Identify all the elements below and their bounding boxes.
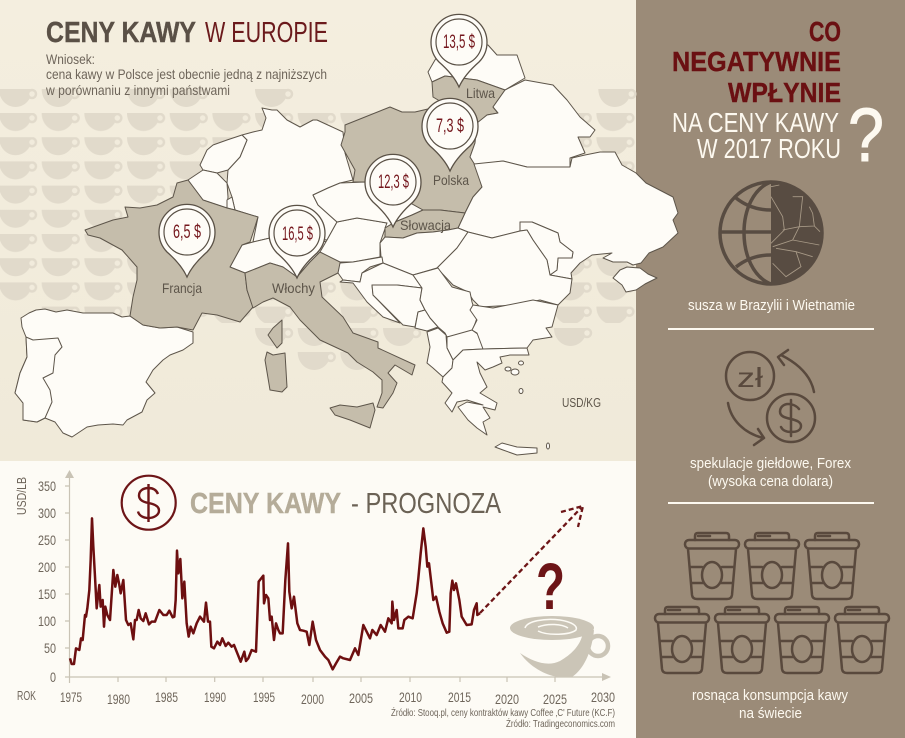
title bbox=[46, 17, 328, 49]
country: Luxembourg bbox=[227, 197, 235, 210]
icon: takeaway cups bbox=[655, 533, 889, 673]
y axis arrow bbox=[65, 470, 74, 478]
y axis title: USD/LB bbox=[15, 477, 29, 515]
line: coffee price history bbox=[70, 518, 480, 669]
y axis labels: 350 bbox=[38, 478, 56, 494]
panel: right sidebar bbox=[636, 0, 905, 738]
sidebar heading: NA CENY KAWY bbox=[672, 107, 839, 138]
x axis labels: 2010 bbox=[399, 689, 422, 705]
text: consumption bbox=[692, 687, 848, 722]
chart heading: CENY KAWY bbox=[190, 488, 341, 520]
pin: Francja bbox=[159, 204, 215, 277]
country: Montenegro bbox=[415, 310, 438, 331]
x axis labels: 1990 bbox=[204, 689, 226, 705]
pin: Słowacja bbox=[365, 154, 421, 227]
x axis labels: 1995 bbox=[253, 689, 275, 705]
conclusion text block: Wniosek: bbox=[46, 51, 95, 67]
country: North Macedonia bbox=[447, 330, 483, 360]
source notes bbox=[391, 706, 615, 730]
country labels: Włochy bbox=[272, 280, 315, 296]
y axis labels: 100 bbox=[38, 613, 56, 629]
map of Europe bbox=[15, 45, 678, 455]
country: Serbia bbox=[413, 268, 477, 337]
country: Czechia bbox=[313, 182, 423, 228]
x axis labels bbox=[60, 689, 615, 707]
x axis labels: 2030 bbox=[591, 689, 615, 705]
country: Switzerland bbox=[230, 236, 327, 277]
region: Crimea bbox=[613, 267, 657, 292]
country: Poland bbox=[341, 105, 482, 213]
panel: chart background bbox=[0, 461, 638, 738]
island: Crete bbox=[495, 443, 537, 455]
country labels bbox=[162, 85, 495, 296]
text: consumption: na świecie bbox=[739, 705, 802, 722]
map unit label: USD/KG bbox=[562, 396, 601, 410]
pin: Francja: 6,5 $ bbox=[173, 222, 201, 243]
x axis title: ROK bbox=[17, 688, 36, 703]
background pattern of cups bbox=[0, 89, 638, 370]
y axis labels: 150 bbox=[38, 586, 56, 602]
country labels: Litwa bbox=[466, 85, 495, 101]
text: speculation: spekulacje giełdowe, Forex bbox=[690, 455, 851, 472]
x axis labels: 2000 bbox=[301, 691, 324, 707]
x axis labels: 2015 bbox=[448, 689, 471, 705]
text: consumption: rosnąca konsumpcja kawy bbox=[692, 687, 848, 704]
country: Moldova bbox=[520, 222, 573, 275]
chart bbox=[15, 470, 615, 707]
country: Austria bbox=[320, 218, 387, 262]
source notes: Źródło: Tradingeconomics.com bbox=[506, 717, 615, 730]
country: Italy bbox=[245, 252, 415, 408]
big question mark: ? bbox=[848, 92, 884, 177]
y axis labels: 300 bbox=[38, 505, 56, 521]
conclusion text block: cena kawy w Polsce jest obecnie jedną z najniższych bbox=[46, 66, 327, 82]
country labels: Francja bbox=[162, 280, 202, 296]
sidebar heading bbox=[672, 16, 841, 164]
question mark: ? bbox=[536, 550, 565, 624]
country: Netherlands bbox=[200, 135, 247, 173]
sidebar heading: CO bbox=[809, 16, 841, 47]
country: Portugal bbox=[15, 337, 62, 422]
country labels: Słowacja bbox=[400, 217, 451, 233]
y axis labels: 0 bbox=[50, 669, 56, 685]
pin: Włochy bbox=[269, 205, 325, 278]
country: Hungary bbox=[380, 228, 468, 275]
x axis arrow bbox=[602, 673, 611, 681]
icon: cracked globe bbox=[720, 181, 823, 285]
text: drought: susza w Brazylii i Wietnamie bbox=[688, 297, 855, 314]
title: CENY KAWY bbox=[46, 17, 196, 49]
y axis labels: 50 bbox=[44, 640, 56, 656]
pin: Włochy: 16,5 $ bbox=[282, 224, 313, 245]
sidebar heading: WPŁYNIE bbox=[728, 77, 841, 108]
title: W EUROPIE bbox=[205, 17, 328, 49]
text: speculation bbox=[690, 455, 851, 490]
island: Sicily bbox=[330, 403, 375, 428]
country: Slovakia bbox=[385, 210, 465, 238]
country: Bosnia bbox=[372, 285, 425, 327]
pin: Litwa: 13,5 $ bbox=[443, 32, 475, 53]
country: Latvia bbox=[428, 45, 525, 90]
country: Spain bbox=[15, 309, 193, 437]
y axis labels bbox=[38, 478, 56, 685]
country: France bbox=[85, 180, 258, 330]
pin: Polska bbox=[422, 98, 478, 171]
arrow: forecast dashed bbox=[480, 506, 583, 613]
pin: Słowacja: 12,3 $ bbox=[378, 172, 409, 193]
country: Albania bbox=[427, 328, 453, 377]
conclusion text block: w porównaniu z innymi państwami bbox=[45, 82, 230, 98]
country: Lithuania bbox=[432, 76, 505, 123]
country: Bulgaria bbox=[470, 300, 558, 349]
y axis labels: 200 bbox=[38, 559, 56, 575]
icon: currency exchange: zł bbox=[737, 362, 764, 393]
country: Greece bbox=[442, 348, 529, 435]
chart axes bbox=[65, 476, 604, 683]
country: Slovenia bbox=[338, 257, 383, 282]
panel: map background bbox=[0, 0, 638, 462]
Aegean islands bbox=[505, 361, 550, 449]
sidebar heading: W 2017 ROKU bbox=[697, 133, 841, 164]
chart heading bbox=[190, 488, 502, 520]
country: Romania bbox=[437, 230, 572, 307]
island: Sardinia bbox=[265, 352, 287, 392]
island: Corsica bbox=[268, 320, 282, 348]
icon: dollar circle bbox=[122, 476, 176, 530]
x axis labels: 2005 bbox=[349, 690, 373, 706]
x axis labels: 1975 bbox=[60, 689, 82, 705]
country: Belarus bbox=[470, 80, 595, 167]
y axis labels: 250 bbox=[38, 532, 56, 548]
icon: coffee cup bbox=[510, 616, 608, 677]
pin: Litwa bbox=[431, 14, 487, 87]
text: speculation: (wysoka cena dolara) bbox=[708, 473, 833, 490]
conclusion text block bbox=[45, 51, 327, 98]
country: Ukraine bbox=[458, 152, 678, 279]
chart heading: - PROGNOZA bbox=[351, 488, 502, 520]
sidebar heading: NEGATYWNIE bbox=[672, 46, 841, 77]
x axis labels: 1980 bbox=[107, 691, 130, 707]
x axis labels: 2025 bbox=[543, 691, 567, 707]
x axis labels: 2020 bbox=[495, 691, 519, 707]
country: Croatia bbox=[340, 263, 422, 323]
pin: Polska: 7,3 $ bbox=[436, 116, 464, 137]
icon: currency exchange bbox=[726, 350, 815, 445]
country labels: Polska bbox=[433, 172, 469, 188]
country: Germany bbox=[227, 108, 353, 242]
x axis labels: 1985 bbox=[155, 689, 178, 705]
country: Belgium bbox=[188, 170, 228, 208]
source notes: Źródło: Stooq.pl, ceny kontraktów kawy Coffee ‚C' Future (KC.F) bbox=[391, 706, 615, 719]
